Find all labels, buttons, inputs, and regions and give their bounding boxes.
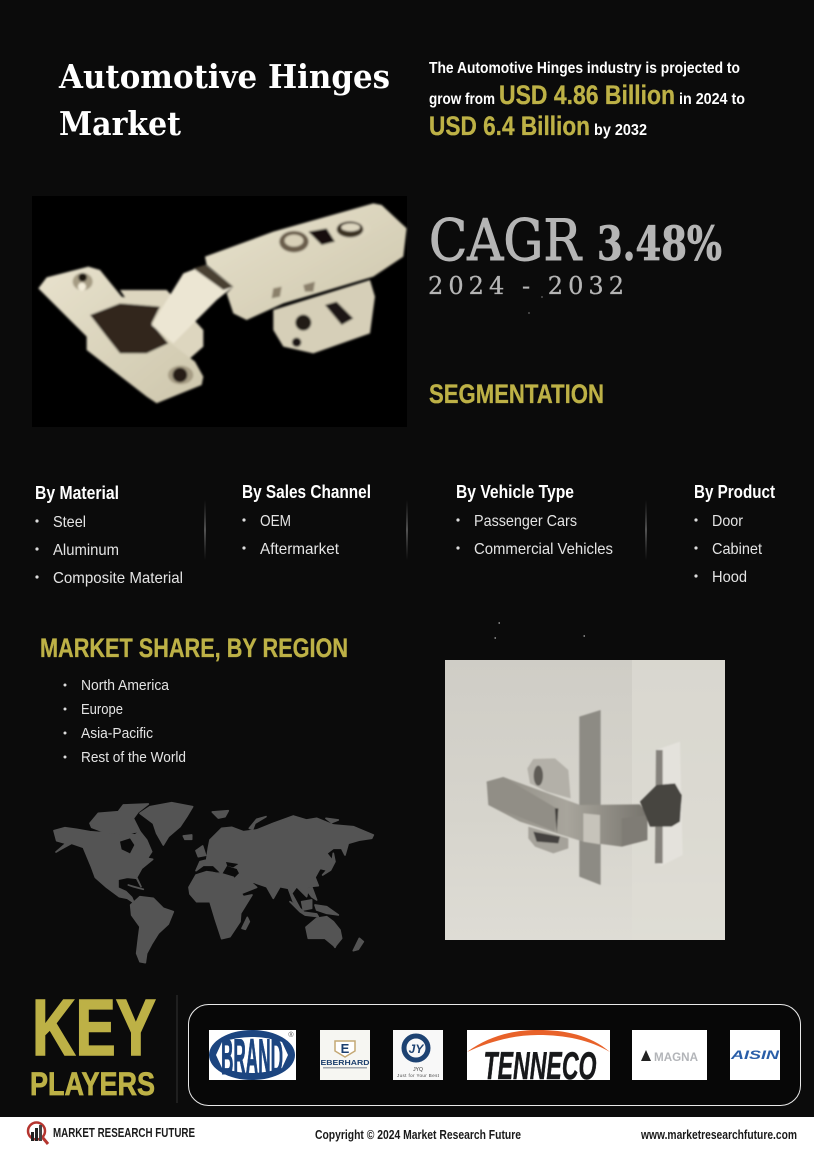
image: door hinge photo <box>445 660 725 940</box>
logo: Magna <box>632 1030 707 1080</box>
hinge mounting plate <box>38 267 203 403</box>
key players heading <box>30 983 156 1102</box>
screws <box>279 231 309 252</box>
market projection text: The Automotive Hinges industry is projected to <box>429 60 740 77</box>
hinge plate window <box>90 303 168 353</box>
segment: by sales channel: By Sales Channel <box>242 482 371 502</box>
specks <box>494 296 585 638</box>
logo: Tenneco: TENNECO <box>484 1045 596 1088</box>
door plate <box>655 742 683 866</box>
segment: by vehicle type: Passenger Cars <box>474 513 577 530</box>
market projection text <box>429 60 745 141</box>
segment: by material: Aluminum <box>53 542 119 559</box>
segment: by vehicle type: Commercial Vehicles <box>474 541 613 558</box>
footer <box>0 1117 814 1150</box>
footer: MARKET RESEARCH FUTURE <box>53 1125 195 1140</box>
segment: by material: By Material <box>35 483 119 503</box>
region list: Europe <box>81 701 123 718</box>
key players panel: BRAND <box>221 1029 283 1085</box>
segment: by material: Steel <box>53 514 86 531</box>
logo: JYQ: Just for Your Best <box>397 1073 440 1078</box>
logo: Eberhard: E <box>341 1041 350 1056</box>
CAGR: CAGR <box>429 208 583 274</box>
market projection text: USD 6.4 Billion <box>429 111 590 141</box>
hinge arm <box>487 777 647 847</box>
logo: Brand: ® <box>288 1031 294 1039</box>
world map <box>54 803 373 963</box>
segment: by sales channel: OEM <box>260 513 291 530</box>
logo: Tenneco <box>467 1030 610 1088</box>
lower mounting plate <box>528 827 568 853</box>
logo: JYQ: JY <box>409 1042 424 1056</box>
segment: by sales channel <box>242 482 371 558</box>
market projection text: in 2024 to <box>679 91 745 108</box>
icon: market research future logo <box>28 1122 48 1144</box>
key players panel <box>188 1004 800 1106</box>
segment: by vehicle type: By Vehicle Type <box>456 482 574 502</box>
segment: by sales channel: Aftermarket <box>260 541 340 558</box>
door strip <box>579 710 601 885</box>
segment: by material <box>35 483 183 587</box>
logo: Brand <box>209 1029 296 1085</box>
lower bracket <box>273 280 375 353</box>
region list <box>64 677 186 766</box>
CAGR: 2024 - 2032 <box>428 272 624 300</box>
heading: segmentation: SEGMENTATION <box>429 379 604 409</box>
logo: Aisin <box>730 1030 780 1080</box>
hinge body <box>205 203 407 320</box>
market projection text: by 2032 <box>594 122 647 139</box>
region list: Asia-Pacific <box>81 725 153 742</box>
heading: market share by region: MARKET SHARE, BY REGION <box>40 633 348 663</box>
market projection text: USD 4.86 Billion <box>499 80 675 110</box>
footer: Copyright © 2024 Market Research Future <box>315 1127 521 1142</box>
logo: Magna: MAGNA <box>654 1050 698 1064</box>
CAGR: 3.48% <box>597 217 722 272</box>
logo: JYQ <box>393 1030 443 1080</box>
segment: by product: Hood <box>712 569 747 586</box>
hinge mounting disc <box>120 290 203 358</box>
logo: Eberhard <box>320 1030 370 1080</box>
title: Automotive Hinges <box>58 57 390 96</box>
segment: by material: Composite Material <box>53 570 183 587</box>
segment: by product <box>694 482 775 586</box>
segment: by product: By Product <box>694 482 775 502</box>
logo: JYQ: JYQ <box>413 1067 423 1073</box>
region list: North America <box>81 677 170 694</box>
upper mounting plate <box>527 758 571 798</box>
market projection text: grow from <box>429 91 495 108</box>
logo: Eberhard: EBERHARD <box>320 1060 370 1067</box>
arm <box>152 265 233 343</box>
segment: by product: Door <box>712 513 744 530</box>
title <box>58 57 390 143</box>
image: cabinet hinge on black <box>32 196 407 427</box>
segment: by product: Cabinet <box>712 541 762 558</box>
key players heading: KEY <box>32 983 156 1072</box>
logo: Aisin: AISIN <box>730 1048 779 1062</box>
segment: by vehicle type <box>456 482 613 558</box>
title: Market <box>59 104 182 143</box>
CAGR <box>428 208 722 300</box>
key players heading: PLAYERS <box>30 1066 155 1102</box>
region list: Rest of the World <box>81 749 186 766</box>
